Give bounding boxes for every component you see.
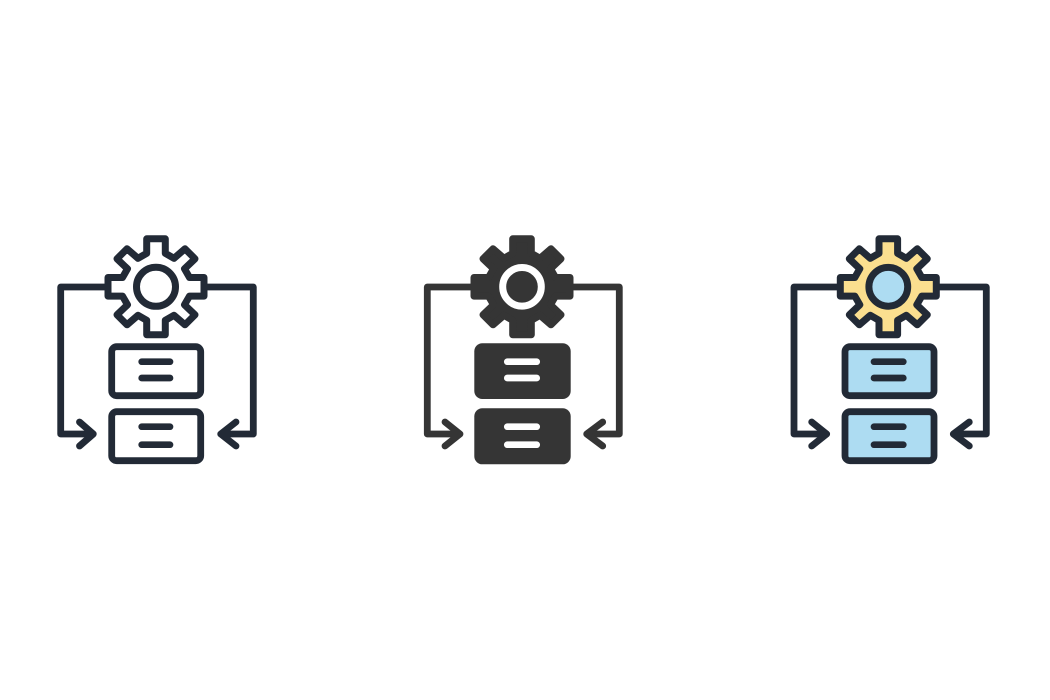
arrow: right loop into lower drawer xyxy=(570,287,619,446)
icon: solid glyph style xyxy=(427,239,619,464)
arrow: right loop into lower drawer xyxy=(936,287,986,446)
lower drawer xyxy=(845,412,934,461)
icon: filled colour style xyxy=(794,239,986,461)
lower drawer xyxy=(474,408,571,464)
icon: gear xyxy=(474,239,570,335)
icon: gear xyxy=(840,239,936,335)
lower drawer xyxy=(112,412,201,461)
upper drawer xyxy=(474,343,571,399)
icon: outline style xyxy=(61,239,253,461)
icon: gear xyxy=(108,239,204,335)
upper drawer xyxy=(112,347,201,396)
arrow: left loop into lower drawer xyxy=(61,287,108,446)
arrow: left loop into lower drawer xyxy=(427,287,474,446)
arrow: left loop into lower drawer xyxy=(794,287,840,446)
upper drawer xyxy=(845,347,934,396)
arrow: right loop into lower drawer xyxy=(204,287,253,446)
